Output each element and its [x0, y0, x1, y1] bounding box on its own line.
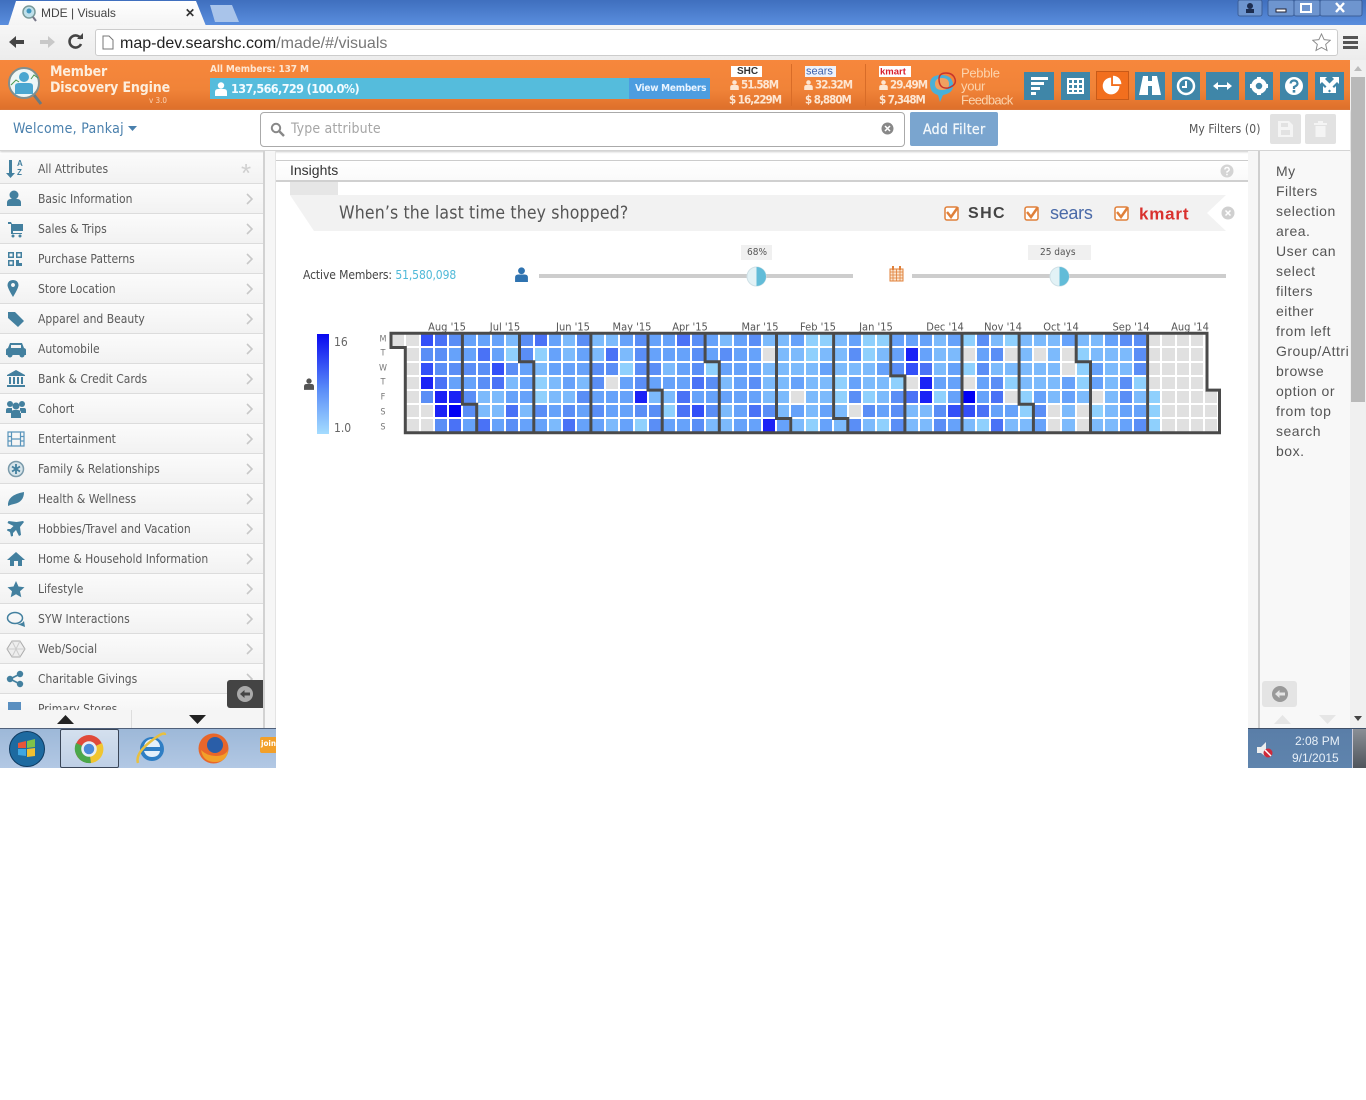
- divider: [131, 710, 132, 728]
- filters help text: selection: [1276, 203, 1336, 219]
- all members label: All Members: 137 M: [210, 64, 309, 75]
- chrome taskbar button: [60, 729, 119, 768]
- faint scroll down: [1319, 715, 1336, 724]
- row: Family & Relationships: Family & Relationships: [38, 462, 160, 476]
- heatmap month labels: Dec '14: [926, 320, 964, 334]
- heatmap day labels: W: [379, 364, 387, 374]
- heatmap day labels: [379, 334, 387, 432]
- sidebar scroll controls: [0, 710, 263, 728]
- heatmap month labels: Jan '15: [859, 320, 893, 334]
- welcome caret: [128, 126, 137, 131]
- icon: help: [1220, 164, 1234, 178]
- members bar: [210, 78, 710, 99]
- slider handle: [1050, 266, 1070, 286]
- slider: percent: [539, 245, 853, 286]
- panel: insights: [276, 159, 1248, 768]
- toolbar buttons: [1024, 71, 1344, 100]
- icon: join me: join: [261, 739, 276, 748]
- filters help text: either: [1276, 303, 1314, 319]
- sidebar collapse button: [227, 680, 263, 708]
- filters help text: box.: [1276, 443, 1304, 459]
- row: Cohort: [0, 394, 263, 424]
- heatmap day labels: S: [380, 422, 386, 432]
- clock time: 2:08 PM: [1295, 734, 1340, 748]
- row: Basic Information: [0, 184, 263, 214]
- filters help text: filters: [1276, 283, 1313, 299]
- faint scroll up: [1274, 715, 1291, 724]
- search placeholder: Type attribute: [291, 121, 381, 137]
- button: pie chart active: [1096, 71, 1129, 100]
- brand stats: kmart: [879, 66, 928, 106]
- tab title: MDE | Visuals: [41, 6, 116, 20]
- icon: person: [215, 82, 227, 96]
- add filter button: Add Filter: [923, 122, 985, 138]
- brand checkbox: SHC: [944, 204, 1006, 222]
- row: Bank & Credit Cards: Bank & Credit Cards: [38, 372, 147, 386]
- row: Basic Information: Basic Information: [38, 192, 132, 206]
- row: Hobbies/Travel and Vacation: Hobbies/Travel and Vacation: [38, 522, 191, 536]
- icon: reload: [68, 33, 83, 49]
- brand stats: SHC: SHC: [737, 66, 758, 77]
- icon: calendar: [890, 266, 904, 282]
- row: All Attributes: A: [17, 159, 23, 168]
- row: Primary Stores: [0, 694, 263, 724]
- legend min: 1.0: [334, 420, 351, 434]
- heatmap day labels: F: [381, 392, 385, 402]
- address text: map-dev.searshc.com/made/#/visuals: [120, 34, 387, 52]
- row: Lifestyle: [0, 574, 263, 604]
- row: Cohort: Cohort: [38, 402, 74, 416]
- slider handle: [746, 266, 766, 286]
- brand stats: sears: $ 8,880M: [805, 92, 851, 106]
- pebble feedback text: [961, 66, 1014, 108]
- filters help text: from left: [1276, 323, 1331, 339]
- scrollbar thumb: [1351, 77, 1365, 402]
- brand stats: kmart: $ 7,348M: [879, 92, 925, 106]
- insights title: Insights: [290, 162, 338, 178]
- brand stats: sears: sears: [806, 66, 833, 78]
- row: Lifestyle: Lifestyle: [38, 582, 83, 596]
- taskbar: right: [1248, 728, 1366, 768]
- active members text: Active Members: 51,580,098: [303, 268, 456, 282]
- icon: back arrow: [9, 36, 24, 48]
- heatmap month labels: Mar '15: [741, 320, 779, 334]
- brand stats: kmart: 29.49M: [890, 77, 927, 91]
- banner tab: [290, 182, 338, 195]
- row: SYW Interactions: SYW Interactions: [38, 612, 130, 626]
- pebble feedback text: your: [961, 78, 985, 94]
- brand checkbox: kmart: [1114, 204, 1189, 223]
- taskbar: left: [0, 728, 276, 768]
- slider value: [1028, 245, 1091, 260]
- brand stats: SHC: $ 16,229M: [729, 92, 781, 106]
- filters help text: User can: [1276, 243, 1336, 259]
- row: Web/Social: [0, 634, 263, 664]
- slider value: [741, 245, 772, 260]
- brand checkbox: sears: [1024, 202, 1093, 222]
- icon: join me: [260, 737, 278, 753]
- heatmap month labels: Jun '15: [556, 320, 590, 334]
- legend max: 16: [334, 334, 348, 348]
- icon: pebble feedback: [930, 72, 956, 102]
- button: table: [1061, 72, 1090, 100]
- brand checkbox: kmart: kmart: [1139, 204, 1189, 223]
- button: funnel: [1024, 72, 1054, 100]
- legend gradient: [317, 334, 329, 434]
- row: All Attributes: All Attributes: [38, 162, 108, 176]
- row: Purchase Patterns: [0, 244, 263, 274]
- row: All Attributes: [0, 154, 263, 184]
- row: Apparel and Beauty: Apparel and Beauty: [38, 312, 145, 326]
- add filter button: [910, 112, 998, 146]
- divider: [865, 64, 866, 106]
- tab close: ✕: [185, 6, 195, 20]
- scrollbar: [1350, 60, 1366, 728]
- filters help text: search: [1276, 423, 1321, 439]
- button: binoculars: [1135, 72, 1165, 100]
- icon: clear search: [882, 122, 894, 134]
- show desktop: [1352, 729, 1366, 768]
- row: Store Location: Store Location: [38, 282, 116, 296]
- filters help text: from top: [1276, 403, 1331, 419]
- heatmap month outlines: [385, 328, 1225, 438]
- icon: person: [515, 267, 528, 282]
- row: Family & Relationships: [0, 454, 263, 484]
- row: Health & Wellness: Health & Wellness: [38, 492, 136, 506]
- browser toolbar: [0, 25, 1366, 60]
- icon: page: [102, 36, 114, 50]
- sidebar: attribute groups: [0, 154, 263, 710]
- save filter button: [1270, 114, 1301, 144]
- filters help text: Filters: [1276, 183, 1318, 199]
- icon: bookmark star: [1312, 33, 1331, 52]
- filters help text: select: [1276, 263, 1316, 279]
- collapse button: [1262, 681, 1297, 707]
- delete filter button: [1305, 114, 1336, 144]
- row: Automobile: Automobile: [38, 342, 100, 356]
- row: Sales & Trips: Sales & Trips: [38, 222, 107, 236]
- scroll down arrow: [1354, 716, 1362, 721]
- icon: internet explorer: [135, 732, 168, 765]
- app title: Member: [50, 64, 107, 80]
- filters help text: My: [1276, 163, 1296, 179]
- brand stats: sears: [804, 66, 852, 106]
- row: Entertainment: Entertainment: [38, 432, 116, 446]
- heatmap day labels: S: [380, 408, 386, 418]
- icon: firefox: [197, 732, 230, 765]
- app header: orange bar: [0, 60, 1350, 110]
- icon: search: [270, 122, 285, 137]
- app title: Discovery Engine: [50, 80, 170, 96]
- row: Purchase Patterns: Purchase Patterns: [38, 252, 135, 266]
- right gutter: [1248, 151, 1260, 728]
- heatmap cells: [391, 333, 1218, 433]
- down arrow: [189, 715, 206, 724]
- view members button: [629, 78, 710, 99]
- heatmap month labels: Nov '14: [984, 320, 1022, 334]
- brand stats: kmart: kmart: [880, 66, 906, 77]
- pebble feedback text: Pebble: [961, 66, 1000, 80]
- slider: days: [912, 245, 1226, 286]
- row: Apparel and Beauty: [0, 304, 263, 334]
- button: resize arrows: [1206, 72, 1239, 100]
- heatmap month labels: Aug '15: [428, 320, 466, 334]
- heatmap month labels: [420, 320, 1220, 334]
- filters help text: [1260, 161, 1350, 471]
- button: clock: [1172, 72, 1200, 100]
- button: settings: [1245, 72, 1273, 100]
- divider: [791, 64, 792, 106]
- app title: v 3.0: [149, 96, 167, 105]
- slider value: 68%: [747, 247, 767, 258]
- row: Charitable Givings: Charitable Givings: [38, 672, 137, 686]
- heatmap month labels: Apr '15: [672, 320, 708, 334]
- row: Hobbies/Travel and Vacation: [0, 514, 263, 544]
- panel: my filters: [1260, 151, 1350, 728]
- view members button: View Members: [635, 83, 706, 94]
- heatmap day labels: T: [381, 348, 385, 358]
- row: Entertainment: [0, 424, 263, 454]
- row: Health & Wellness: [0, 484, 263, 514]
- heatmap month labels: Feb '15: [800, 320, 836, 334]
- row: Store Location: [0, 274, 263, 304]
- browser tab bar: [0, 0, 1366, 26]
- brand stats: SHC: 51.58M: [741, 77, 778, 91]
- heatmap month labels: Sep '14: [1112, 320, 1150, 334]
- icon: MDE logo: [8, 67, 42, 105]
- row: Automobile: [0, 334, 263, 364]
- filter bar: [0, 110, 1350, 151]
- filters help text: Group/Attri: [1276, 343, 1349, 359]
- brand checkbox: SHC: SHC: [968, 204, 1006, 222]
- heatmap month labels: Aug '14: [1171, 320, 1209, 334]
- question banner: [290, 195, 1226, 231]
- icon: speaker muted: [1256, 741, 1274, 759]
- filters help text: option or: [1276, 383, 1335, 399]
- legend: colour scale: [304, 334, 351, 434]
- app title: [50, 64, 170, 105]
- heatmap day labels: T: [381, 378, 385, 388]
- search box: [260, 112, 905, 147]
- row: Web/Social: Web/Social: [38, 642, 97, 656]
- new tab button: [207, 5, 239, 22]
- brand stats: sears: 32.32M: [815, 77, 852, 91]
- pebble feedback text: Feedback: [961, 92, 1012, 108]
- heatmap month labels: May '15: [613, 320, 651, 334]
- up arrow: [57, 715, 74, 724]
- icon: start orb: [8, 730, 46, 768]
- question text: When’s the last time they shopped?: [339, 203, 628, 223]
- button: help: [1280, 72, 1308, 100]
- icon: person: [304, 378, 314, 390]
- row: Sales & Trips: [0, 214, 263, 244]
- row: SYW Interactions: [0, 604, 263, 634]
- row: Home & Household Information: [0, 544, 263, 574]
- brand checkbox: sears: sears: [1050, 202, 1093, 222]
- clock date: 9/1/2015: [1292, 751, 1339, 765]
- filters help text: area.: [1276, 223, 1310, 239]
- heatmap month labels: Oct '14: [1043, 320, 1079, 334]
- heatmap month labels: Jul '15: [490, 320, 520, 334]
- slider value: 25 days: [1040, 247, 1076, 258]
- insights heading bar: [276, 160, 1248, 182]
- button: fullscreen: [1315, 72, 1344, 100]
- row: Charitable Givings: [0, 664, 263, 694]
- row: All Attributes: *: [241, 158, 251, 188]
- window controls: [1238, 0, 1362, 16]
- member count: 137,566,729 (100.0%): [231, 80, 359, 95]
- row: Bank & Credit Cards: [0, 364, 263, 394]
- my filters count: My Filters (0): [1189, 122, 1261, 136]
- heatmap day labels: M: [380, 334, 386, 344]
- left gutter: [263, 151, 276, 728]
- row: All Attributes: Z: [17, 168, 22, 177]
- brand stats: SHC: [729, 66, 782, 106]
- scroll up arrow: [1354, 66, 1362, 71]
- row: Home & Household Information: Home & Household Information: [38, 552, 208, 566]
- filters help text: browse: [1276, 363, 1324, 379]
- active tab: [8, 1, 206, 26]
- icon: tab favicon: [22, 5, 37, 22]
- icon: forward arrow: [40, 36, 55, 48]
- address bar: [95, 29, 1338, 56]
- icon: menu: [1343, 36, 1358, 49]
- icon: close banner: [1222, 206, 1234, 220]
- welcome text: Welcome, Pankaj: [13, 121, 124, 137]
